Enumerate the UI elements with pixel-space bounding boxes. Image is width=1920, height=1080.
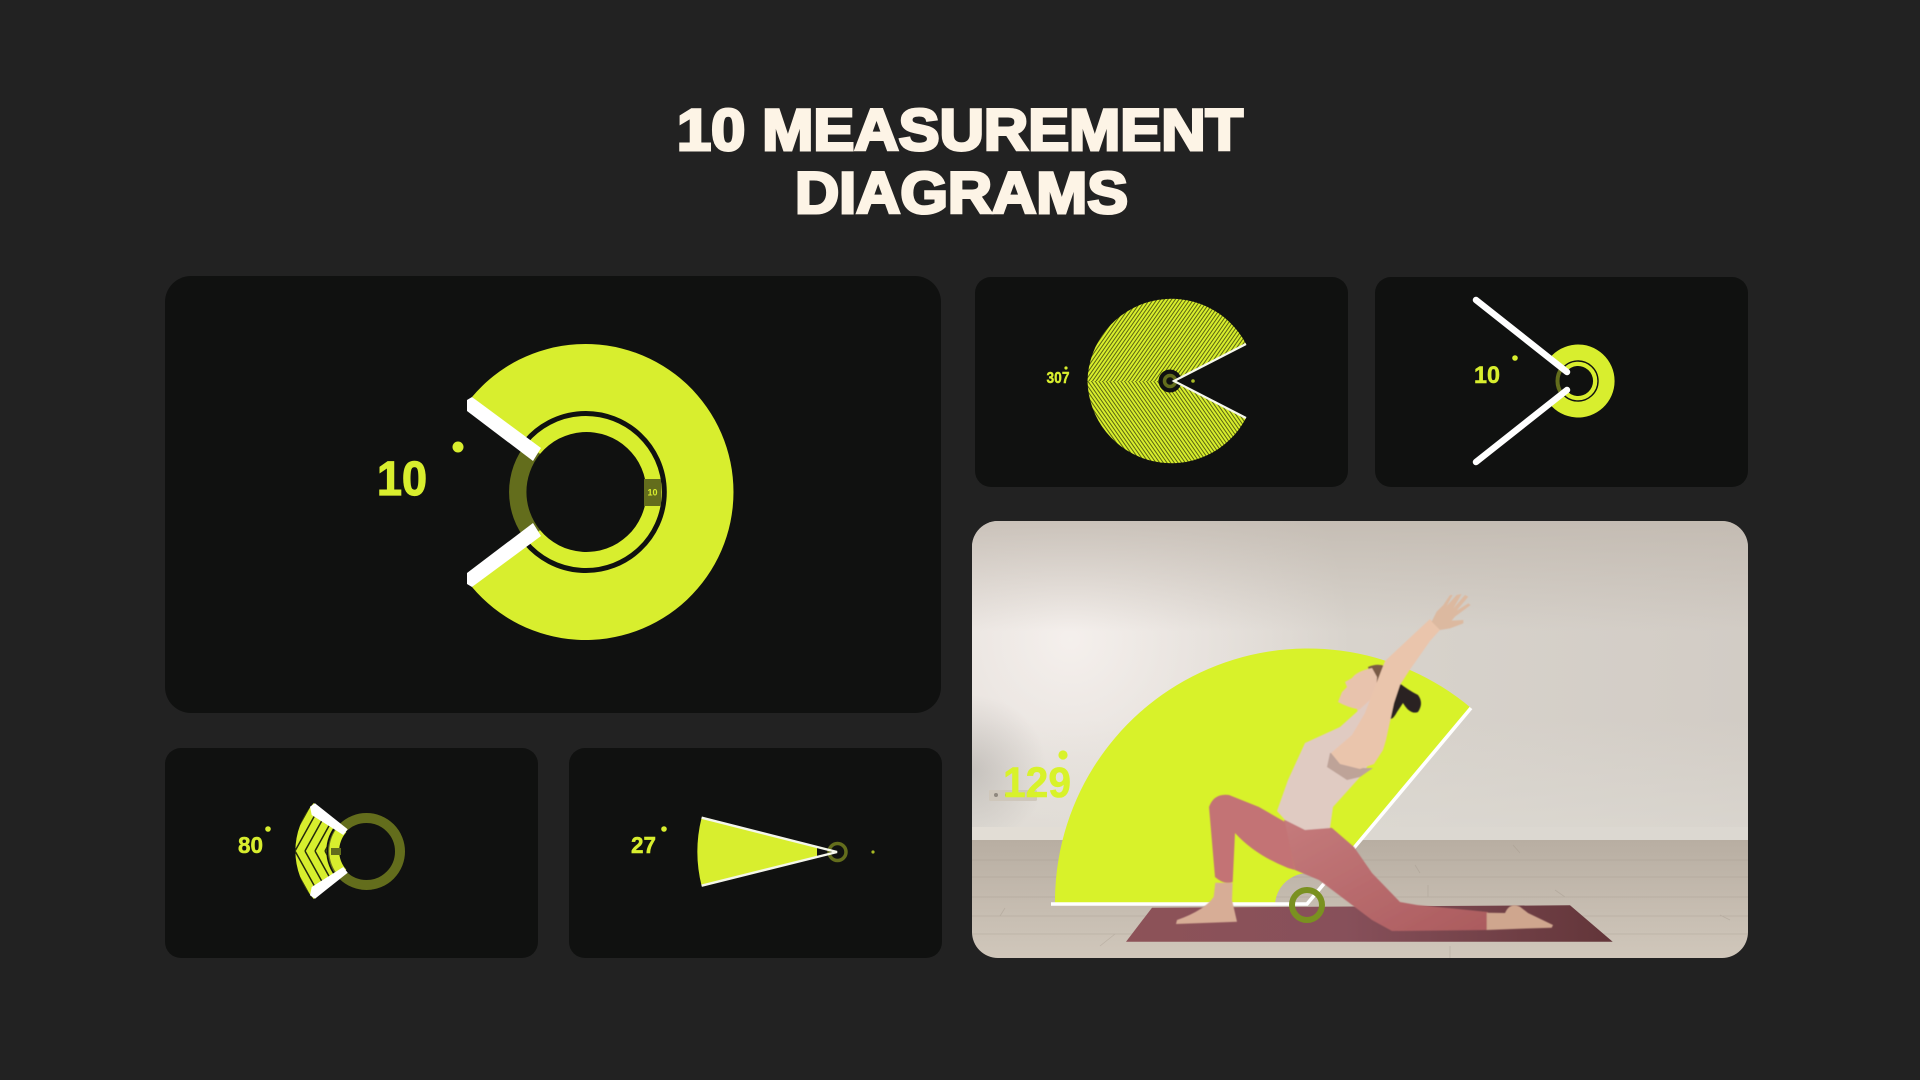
degree dot: [1512, 355, 1518, 361]
olive ring: [829, 844, 846, 860]
socket on wall: [989, 790, 1037, 801]
degree dot: [1058, 750, 1068, 760]
hand: [1432, 594, 1471, 630]
olive arc: [1557, 368, 1562, 394]
white edges: [702, 818, 837, 886]
white edge upper: [1476, 300, 1567, 372]
front leg: [1209, 795, 1295, 883]
tank back panel: [1327, 753, 1373, 780]
olive ring: [1292, 890, 1322, 920]
panel: small donut gauge 10: [1375, 277, 1748, 487]
panel: large donut gauge 10: [165, 276, 941, 713]
title: [677, 98, 1243, 226]
white edge upper: [310, 803, 348, 835]
olive ring: [333, 818, 400, 885]
hair bun: [1387, 682, 1421, 719]
face and neck: [1338, 668, 1378, 712]
white edge lower: [467, 523, 541, 587]
value label: 129: [1003, 759, 1071, 807]
panel: yoga photo with 129 gauge: [972, 521, 1748, 958]
raised arm: [1331, 619, 1440, 769]
small mark: [871, 850, 875, 854]
black ring: [1562, 361, 1598, 401]
olive tick with inner value: [644, 479, 661, 506]
floor: [972, 840, 1748, 958]
olive gap arc: [509, 443, 540, 541]
hair: [1368, 665, 1400, 697]
yellow wedge: [697, 818, 817, 886]
infographic canvas: [165, 108, 1748, 958]
olive tick with inner value: 10: [647, 488, 658, 498]
degree dot: [661, 826, 667, 832]
panel: hatched pacman gauge 307: [975, 277, 1348, 487]
white edge upper: [467, 397, 541, 461]
hatched lower half: [1088, 381, 1246, 463]
person: [1176, 594, 1553, 931]
panel: narrow fan gauge 80: [165, 748, 538, 958]
black inner ring: [526, 414, 664, 570]
yellow donut: [1550, 345, 1615, 417]
back leg: [1284, 820, 1488, 931]
hatched upper half: [1088, 299, 1246, 381]
yellow sector: [1055, 648, 1471, 904]
white edges: [1174, 344, 1246, 418]
white edge lower: [1476, 390, 1567, 462]
value label: 10: [1474, 362, 1500, 389]
small mark: [1191, 379, 1195, 383]
wall: [972, 521, 1748, 841]
value label: 27: [631, 832, 656, 858]
value label: 80: [238, 832, 263, 858]
white edge lower: [310, 867, 348, 899]
inner yellow band: [329, 826, 346, 876]
back foot: [1487, 905, 1553, 930]
hatched fan: [295, 803, 333, 899]
olive tick: [331, 848, 341, 855]
title: 10 MEASUREMENT: [677, 98, 1243, 163]
panel: wedge gauge 27: [569, 748, 942, 958]
title: DIAGRAMS: [795, 161, 1128, 226]
centre hub: [1158, 370, 1182, 392]
white baseline and edge: [1051, 708, 1471, 904]
yellow donut sector: [472, 344, 733, 640]
tank top: [1276, 701, 1370, 830]
degree dot: [1064, 366, 1068, 370]
value label: 10: [377, 453, 427, 506]
degree dot: [265, 826, 271, 832]
degree dot: [452, 442, 464, 452]
yoga mat: [1126, 905, 1613, 942]
front foot: [1176, 883, 1237, 924]
value label: 307: [1046, 370, 1070, 387]
